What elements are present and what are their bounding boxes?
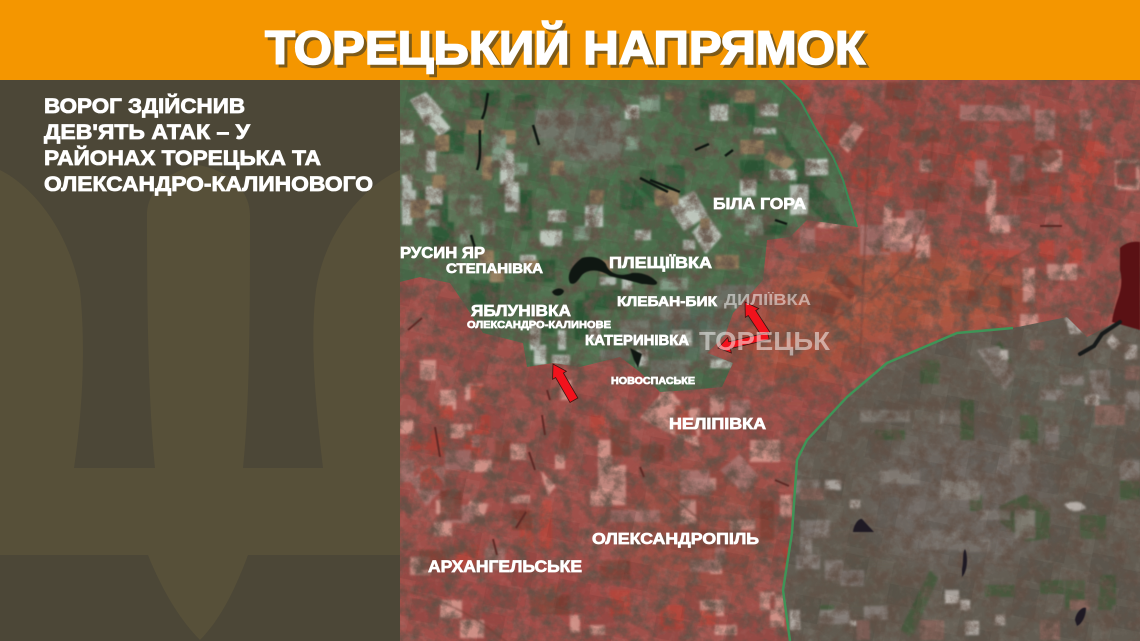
front line: green border of grey zone	[783, 328, 1013, 641]
label: Диліївка: ДИЛІЇВКА	[724, 292, 811, 309]
map zone: Pokrovsk-side territory (grey satellite)	[780, 310, 1140, 641]
description text block: РАЙОНАХ ТОРЕЦЬКА ТА	[44, 146, 321, 170]
label: Торецьк: ТОРЕЦЬК	[699, 326, 830, 356]
label: Архангельське: АРХАНГЕЛЬСЬКЕ	[428, 558, 582, 576]
water bodies	[408, 93, 1140, 626]
icon: trident watermark	[0, 165, 400, 640]
description text block: ВОРОГ ЗДІЙСНИВ	[44, 94, 245, 118]
label: Степанівка: СТЕПАНІВКА	[446, 261, 543, 276]
title: ТОРЕЦЬКИЙ НАПРЯМОК	[268, 24, 868, 77]
map zone: Ukrainian-held territory (satellite green)	[390, 80, 860, 400]
description text block: ДЕВ'ЯТЬ АТАК – У	[44, 121, 251, 144]
label: Неліпівка: НЕЛІПІВКА	[669, 416, 766, 433]
map	[390, 80, 1140, 641]
label: Плещіївка: ПЛЕЩІЇВКА	[609, 254, 713, 272]
label: Катеринівка: КАТЕРИНІВКА	[585, 333, 690, 349]
label: Клебан-Бик: КЛЕБАН-БИК	[617, 293, 717, 309]
map zone: occupied territory (red)	[400, 80, 1140, 641]
description text block	[44, 94, 373, 196]
front line: bright edge of northern pocket	[780, 80, 857, 227]
label: Новоспаське: НОВОСПАСЬКЕ	[611, 376, 695, 387]
label: Олександропіль: ОЛЕКСАНДРОПІЛЬ	[592, 531, 759, 548]
icon: red attack arrow south	[553, 364, 578, 402]
label: Біла Гора: БІЛА ГОРА	[713, 196, 806, 213]
icon: red attack arrow toward Toretsk	[718, 333, 769, 353]
decorative: field mosaic and grain	[400, 80, 1140, 641]
left panel	[0, 80, 400, 641]
title: ТОРЕЦЬКИЙ НАПРЯМОК	[265, 21, 865, 74]
description text block: ОЛЕКСАНДРО-КАЛИНОВОГО	[44, 173, 373, 196]
label: Олександро-Калинове: ОЛЕКСАНДРО-КАЛИНОВЕ	[467, 319, 611, 331]
label: Русин Яр: РУСИН ЯР	[400, 245, 485, 262]
label: Яблунівка: ЯБЛУНІВКА	[471, 303, 571, 320]
header bar	[0, 0, 1140, 80]
icon: red attack arrow north-east	[745, 302, 770, 337]
